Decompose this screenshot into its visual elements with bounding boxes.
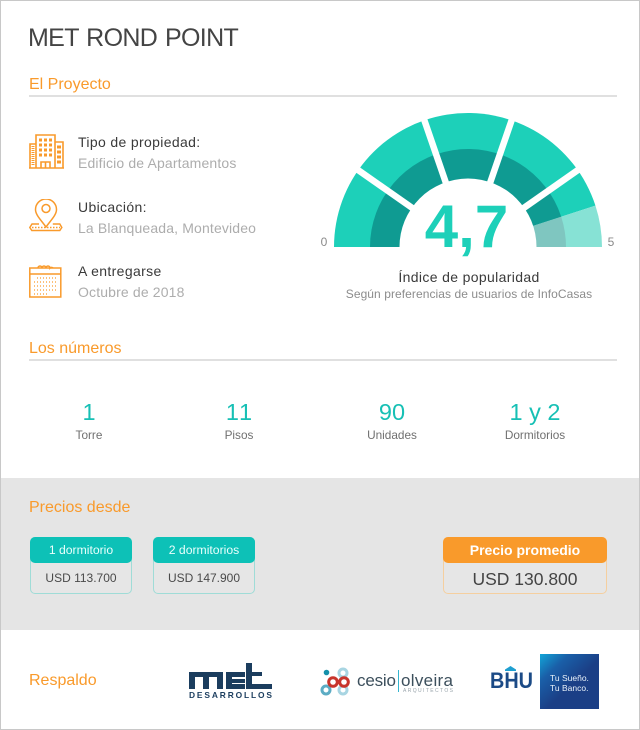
logo: Cesio Olveira — [320, 668, 454, 696]
value: Edificio de Apartamentos: Edificio de Apartamentos — [78, 155, 236, 171]
gauge value: 4,7 — [425, 193, 508, 260]
card: 1 dormitorio: USD 113.700 — [45, 571, 117, 585]
label: A entregarse: A entregarse — [78, 263, 162, 279]
stat: torre: 1 — [82, 399, 96, 425]
label: Tipo de propiedad: Tipo de propiedad: — [78, 134, 201, 150]
heading: Precios desde: Precios desde — [29, 499, 130, 516]
logo: Cesio Olveira: ARQUITECTOS — [403, 688, 454, 694]
value: Octubre de 2018: Octubre de 2018 — [78, 284, 185, 300]
icon: calendar — [29, 265, 62, 298]
heading: El Proyecto: El Proyecto — [29, 76, 111, 93]
value: La Blanqueada, Montevideo: La Blanqueada, Montevideo — [78, 220, 256, 236]
card: 2 dormitorios — [153, 537, 255, 594]
title: MET ROND POINT — [28, 24, 238, 52]
logo: Cesio Olveira: cesio — [357, 671, 396, 690]
stat: dormitorios: 1 y 2 — [510, 399, 560, 425]
logo: MET Desarrollos: DESARROLLOS — [189, 690, 272, 700]
logo: BHU: Tu Sueño. — [550, 673, 589, 683]
logo: Cesio Olveira: olveira — [401, 671, 454, 690]
stat: unidades — [367, 399, 417, 442]
scale max: 5 — [608, 235, 615, 249]
card: 1 dormitorio — [30, 537, 132, 594]
heading: Respaldo: Respaldo — [29, 672, 97, 689]
card: 1 dormitorio: 1 dormitorio — [49, 543, 113, 557]
segment gaps — [337, 96, 599, 247]
stat: torre — [76, 399, 102, 442]
stat: pisos: Pisos — [225, 428, 253, 442]
stat: pisos — [225, 399, 253, 442]
icon: location pin — [29, 199, 63, 232]
heading: Los números: Los números — [29, 340, 122, 357]
logo: BHU — [490, 654, 599, 709]
gauge chart — [321, 113, 615, 260]
outer ring — [334, 113, 595, 247]
gauge sublabel: Según preferencias de usuarios de InfoCasas — [346, 287, 592, 301]
stat: dormitorios — [505, 399, 565, 442]
panel: precios — [0, 478, 640, 630]
card: precio promedio: Precio promedio — [470, 542, 580, 558]
stat: torre: Torre — [76, 428, 102, 442]
icon: building — [29, 134, 64, 169]
logo: BHU: Tu Banco. — [550, 683, 588, 693]
card: precio promedio: USD 130.800 — [472, 569, 578, 589]
gauge label: Índice de popularidad — [398, 269, 540, 285]
logo: BHU: BHU — [490, 668, 533, 693]
card: precio promedio — [443, 537, 607, 594]
card: 2 dormitorios: 2 dormitorios — [169, 543, 239, 557]
stat: pisos: 11 — [226, 399, 252, 425]
scale min: 0 — [321, 235, 328, 249]
stat: unidades: 90 — [379, 399, 405, 425]
label: Ubicación: Ubicación: — [78, 199, 147, 215]
stat: dormitorios: Dormitorios — [505, 428, 565, 442]
logo: MET Desarrollos — [189, 663, 272, 700]
card: 2 dormitorios: USD 147.900 — [168, 571, 240, 585]
stat: unidades: Unidades — [367, 428, 417, 442]
